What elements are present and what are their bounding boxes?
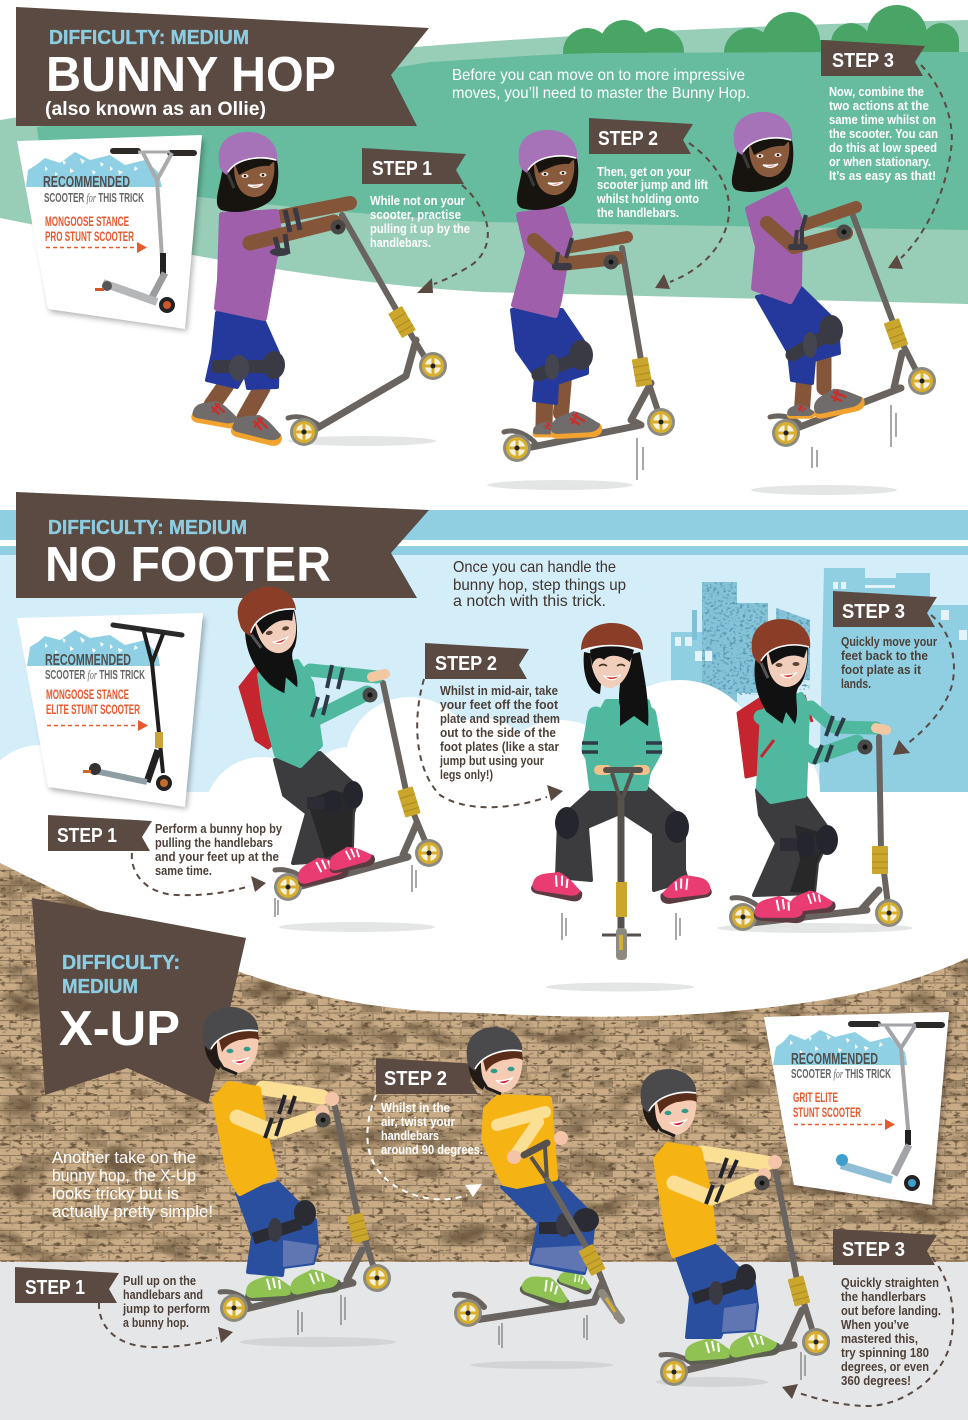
step 2 text: legs only!) [440,768,493,782]
arrow: step 1 [417,185,488,293]
recommended card: mongoose stance pro: SCOOTER for THIS TRICK [44,191,144,205]
step 2 text: handlebars [381,1129,439,1143]
intro text [452,67,750,102]
subtitle: (also known as an Ollie) [45,98,266,120]
step 2 text: air, twist your [381,1115,455,1129]
recommended card: mongoose stance pro [17,135,204,331]
step 1 text: pulling the handlebars [155,836,273,850]
background: city buildings [671,568,968,792]
step 1 tag: STEP 1 [372,158,432,180]
step 2 tag [425,643,529,679]
recommended card: grit elite: STUNT SCOOTER [793,1105,861,1120]
step 1 tag [15,1267,119,1303]
figure: girl with backpack, step 3 [717,619,913,933]
step 3 text: the scooter. You can [829,127,938,141]
step 2 text [596,165,709,220]
step 2 tag [589,118,693,154]
step 3 text: out before landing. [841,1304,941,1318]
figure: boy twisting bars, step 2 [454,1027,621,1369]
step 3 text: the handlerbars [841,1290,926,1304]
step 3 text: Quickly move your [841,635,937,649]
background: brick wall [0,860,968,1262]
step 1 text: While not on your [370,194,465,208]
intro text [453,559,626,610]
step 3 tag: STEP 3 [842,601,905,623]
step 3 tag [833,1229,937,1265]
figure: girl on scooter, step 3 [732,112,936,495]
step 2 text: the handlebars. [597,206,679,220]
step 3 text: foot plate as it [841,663,922,677]
step 3 text: Now, combine the [829,85,924,99]
background: light green band [0,20,968,304]
arrow: step 1 [99,1303,233,1347]
step 1 text: Pull up on the [123,1274,196,1288]
banner: x-up [32,898,246,1104]
step 3 text [841,635,937,691]
recommended card: mongoose stance pro: PRO STUNT SCOOTER [45,229,134,244]
figure: girl with backpack, step 1 [233,581,443,932]
step 3 text: 360 degrees! [841,1374,911,1388]
background: blue stripes [0,510,968,555]
figure: girl front view, step 2 [530,623,713,992]
step 1 text: handlebars. [370,236,431,250]
intro text: Once you can handle the [453,559,616,576]
step 1 text: a bunny hop. [123,1316,189,1330]
arrow: step 2 [655,143,729,289]
step 2 text: your feet off the foot [440,698,559,712]
step 2 text: scooter jump and lift [597,178,709,192]
step 1 text: pulling it up by the [370,222,470,236]
step 1 tag: STEP 1 [57,825,117,847]
step 1 text: jump to perform [122,1302,210,1316]
difficulty label [62,952,180,998]
title: NO FOOTER [45,538,331,592]
step 1 text [155,822,282,878]
background: sky [0,555,968,795]
section: x-up [0,860,968,1420]
difficulty label: MEDIUM [62,976,138,998]
intro text: bunny hop, the X-Up [52,1167,196,1185]
step 3 text: two actions at the [829,99,929,113]
step 3 text: mastered this, [841,1332,918,1346]
step 2 tag: STEP 2 [598,128,658,150]
step 3 text: do this at low speed [829,141,937,155]
difficulty label: DIFFICULTY: MEDIUM [48,517,247,539]
step 1 text: and your feet up at the [155,850,279,864]
banner: no footer [16,492,429,598]
recommended card: mongoose stance pro: MONGOOSE STANCE [45,214,129,229]
step 1 text [122,1274,210,1330]
step 1 text: scooter, practise [370,208,461,222]
background: bushes [563,5,959,78]
section: bunny hop [0,5,968,495]
intro text: moves, you’ll need to master the Bunny Hop. [452,85,750,102]
step 1 text: Perform a bunny hop by [155,822,282,836]
step 3 tag: STEP 3 [832,50,894,72]
step 3 text: or when stationary. [829,155,931,169]
step 3 text: same time whilst on [829,113,936,127]
title: BUNNY HOP [46,48,336,102]
step 2 tag: STEP 2 [384,1068,447,1090]
intro text: Before you can move on to more impressive [452,67,745,84]
recommended card: grit elite: SCOOTER for THIS TRICK [791,1067,891,1081]
step 3 text: It’s as easy as that! [829,169,936,183]
arrow: step 3 [888,65,952,269]
step 3 tag [833,591,937,627]
recommended card: mongoose stance elite [17,613,205,809]
step 3 text: Quickly straighten [841,1276,939,1290]
recommended card: mongoose stance elite: RECOMMENDED [45,652,131,669]
recommended card: grit elite [764,1012,951,1207]
step 2 text [381,1101,483,1157]
recommended card: grit elite: RECOMMENDED [791,1051,878,1068]
background: ground [0,1262,968,1420]
step 3 text: feet back to the [841,649,928,663]
intro text: Another take on the [52,1149,196,1167]
step 3 text [841,1276,941,1388]
intro text: a notch with this trick. [453,593,606,610]
figure: girl on scooter, step 2 [487,130,675,490]
figure: boy on scooter, step 1 [203,1007,396,1347]
recommended card: mongoose stance elite: MONGOOSE STANCE [46,687,129,702]
difficulty label: DIFFICULTY: MEDIUM [49,27,249,49]
step 3 text: When you’ve [841,1318,909,1332]
step 2 text: jump but using your [439,754,544,768]
banner: bunny hop [16,7,429,126]
step 1 text [370,194,470,250]
intro text [52,1149,213,1221]
recommended card: grit elite: GRIT ELITE [793,1090,838,1105]
step 1 tag [362,148,466,184]
step 3 text: try spinning 180 [841,1346,929,1360]
step 2 text: whilst holding onto [596,192,699,206]
arrow: step 2 [417,679,563,807]
step 3 text: degrees, or even [841,1360,929,1374]
step 2 text: Whilst in the [381,1101,450,1115]
arrow: step 3 [893,615,954,755]
section: no footer [0,492,968,992]
recommended card: mongoose stance elite: ELITE STUNT SCOOTER [46,702,140,717]
recommended card: mongoose stance elite: SCOOTER for THIS TRICK [45,668,145,682]
intro text: looks tricky but is [52,1185,179,1203]
background: clouds [0,680,968,873]
step 2 tag [376,1058,480,1094]
step 2 text: foot plates (like a star [440,740,559,754]
step 2 text: plate and spread them [440,712,560,726]
step 2 text: out to the side of the [440,726,556,740]
step 3 text [829,85,938,183]
intro text: actually pretty simple! [52,1203,213,1221]
step 2 text: Then, get on your [597,165,691,179]
arrow: step 2 [367,1095,482,1199]
figure: girl beside scooter [190,132,447,448]
step 2 text: around 90 degrees. [381,1143,483,1157]
step 3 text: lands. [841,677,871,691]
step 1 text: handlebars and [123,1288,203,1302]
step 1 tag [48,815,152,851]
step 1 tag: STEP 1 [25,1277,85,1299]
step 3 tag: STEP 3 [842,1239,905,1261]
step 2 text: Whilst in mid-air, take [440,684,558,698]
step 2 text [439,684,560,782]
step 3 tag [821,40,925,76]
difficulty label: DIFFICULTY: [62,952,180,974]
title: X-UP [59,1002,180,1056]
step 2 tag: STEP 2 [435,653,497,675]
intro text: bunny hop, step things up [453,577,626,594]
step 1 text: same time. [155,864,212,878]
arrow: step 1 [132,853,266,895]
recommended card: mongoose stance pro: RECOMMENDED [43,174,130,191]
arrow: step 3 [782,1257,953,1406]
background: dark green band [37,52,968,230]
figure: boy on scooter, step 3 [641,1069,830,1387]
